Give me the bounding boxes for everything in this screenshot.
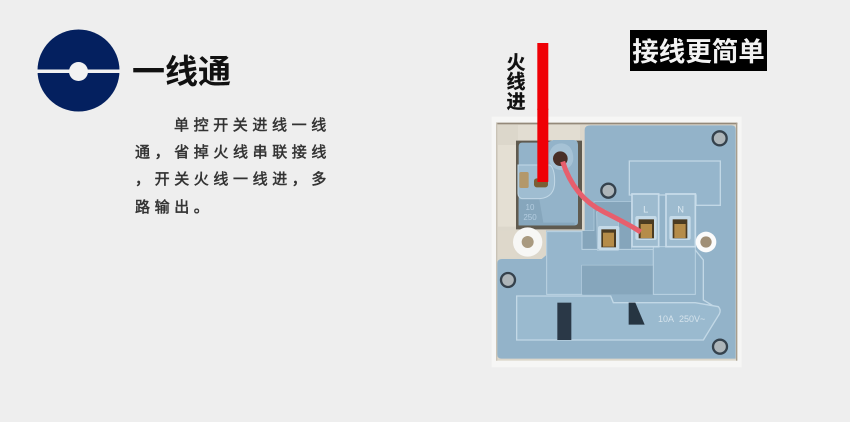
white standoff left: [513, 227, 542, 257]
main blue plate: [497, 125, 736, 359]
white standoff right: [696, 232, 716, 252]
module terminals: [519, 172, 529, 188]
heading badge: simpler wiring: 接线更简单: [632, 37, 765, 67]
photo background: [492, 117, 742, 367]
red wire inside photo: [537, 108, 548, 182]
vertical label: live wire in: 线: [506, 71, 526, 93]
raised top block: [629, 161, 720, 205]
vertical label: live wire in: [506, 53, 526, 113]
terminals L N earth: L: [643, 205, 648, 215]
socket back photo: [492, 108, 742, 367]
vertical label: live wire in: 火: [506, 53, 526, 74]
socket slot: earth: [557, 303, 571, 340]
socket slot: triangular: [629, 303, 645, 325]
module screw hole: [549, 143, 573, 170]
module engraving: 10: [526, 203, 535, 212]
description text block: 通，省掉火线串联接线: [135, 144, 331, 161]
title: 一线通: [132, 53, 231, 90]
socket back photo: 250: [523, 213, 537, 222]
pink jumper wire: [563, 162, 641, 232]
beige frame: [496, 123, 737, 361]
socket face: [517, 296, 720, 340]
terminals L N earth: N: [677, 205, 684, 215]
description text block: 单控开关进线一线: [174, 117, 331, 134]
terminal recess: [582, 202, 632, 249]
right edge trim: [695, 250, 720, 340]
screws: [501, 131, 727, 354]
lower raised blocks: [547, 232, 653, 294]
rating text: 10A 250V~: [658, 314, 705, 324]
module recess edge: [516, 141, 582, 229]
description text block: [135, 117, 331, 216]
terminals L N earth: [597, 194, 695, 250]
vertical label: live wire in: 进: [506, 91, 526, 113]
icon: navy disc with white line: [37, 30, 120, 112]
left switch module: [519, 140, 578, 225]
description text block: ，开关火线一线进，多: [135, 171, 331, 188]
description text block: 路输出。: [135, 199, 213, 216]
red wire above photo: [537, 43, 548, 110]
